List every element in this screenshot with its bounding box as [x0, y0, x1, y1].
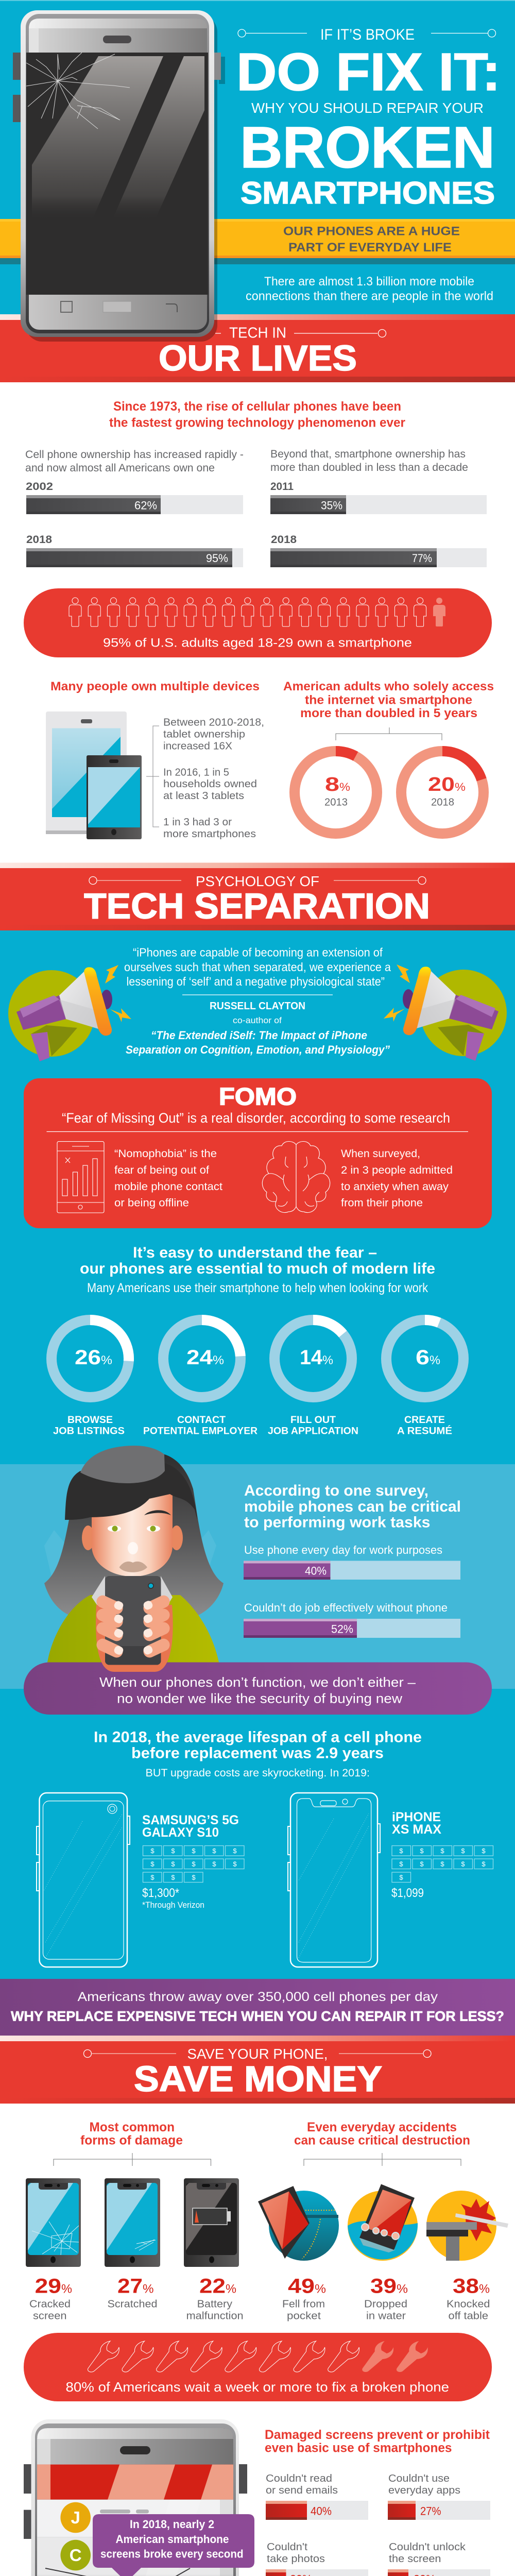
icon: iphone outline [288, 1793, 380, 1967]
panel: multiple devices: Many people own multiple devices [50, 680, 260, 693]
callout: 80% wait a week: 80% of Americans wait a week or more to fix a broken phone [66, 2379, 449, 2395]
icon: megaphone left [8, 965, 131, 1061]
text: according to one survey: to performing work tasks [244, 1514, 431, 1531]
dollar boxes: $ [440, 1847, 444, 1855]
contact avatars: J [71, 2508, 80, 2527]
bar: 2018 77%: 77% [412, 552, 432, 565]
donut: fill out job application [268, 1320, 358, 1436]
stat: dropped in water 39%: % [397, 2282, 408, 2296]
bar: 2018 95%: 95% [206, 552, 228, 565]
heading: psychology of tech separation [0, 862, 515, 930]
contact avatars: C [70, 2546, 82, 2565]
dollar boxes: $ [212, 1847, 216, 1855]
dollar boxes: $ [399, 1860, 403, 1868]
list rows [37, 2500, 233, 2576]
band: americans throw away: WHY REPLACE EXPENSIVE TECH WHEN YOU CAN REPAIR IT FOR LESS? [11, 2009, 504, 2024]
callout: when our phones don't function: no wonder we like the security of buying new [117, 1690, 402, 1706]
dollar boxes: $ [192, 1873, 196, 1882]
bar: emails 40%: Couldn't read [266, 2473, 332, 2484]
icon: phone with cracked screen [26, 2178, 81, 2267]
stat: scratched 27%: 27 [117, 2275, 143, 2298]
illustration: big cracked phone with contacts [24, 2419, 254, 2576]
panel: FOMO [24, 1078, 492, 1228]
header eyebrow: if it's broke: IF IT’S BROKE [320, 26, 415, 43]
donut: contact potential employer [143, 1320, 258, 1436]
donut: create a resume: 6 [416, 1346, 430, 1369]
donut: fill out job application: % [322, 1353, 333, 1367]
stat: scratched 27% [107, 2275, 158, 2310]
band: americans throw away: Americans throw away over 350,000 cell phones per day [77, 1990, 438, 2004]
icon: megaphone right [384, 964, 507, 1061]
heading: everyday accidents [294, 2120, 470, 2166]
samsung price: $1,300* [142, 1886, 179, 1900]
icon: row of people [69, 598, 445, 626]
title: SMARTPHONES [241, 176, 495, 210]
stat: battery malfunction 22%: Battery [197, 2299, 232, 2310]
bar: unlock 20%: Couldn't unlock [389, 2541, 466, 2553]
heading: easy to understand the fear: Many Americans use their smartphone to help when looking for work [87, 1281, 428, 1295]
stat: battery malfunction 22%: malfunction [186, 2311, 244, 2322]
dollar boxes [392, 1845, 493, 1883]
heading: everyday accidents: can cause critical destruction [294, 2133, 470, 2148]
icon: phone with signal bars [57, 1142, 104, 1213]
text: nomophobia: mobile phone contact [114, 1181, 222, 1193]
dollar boxes: $ [192, 1847, 196, 1855]
icon: tablet and phone [46, 711, 142, 839]
hands: fingers [94, 1594, 172, 1659]
panel: damaged screens [265, 2428, 490, 2576]
panel: damaged screens: Damaged screens prevent or prohibit [265, 2428, 490, 2442]
stat: fell from pocket 49% [282, 2275, 326, 2322]
callout: 95% of adults [24, 588, 492, 657]
panel: multiple devices: 1 in 3 had 3 or [163, 817, 232, 828]
dollar boxes: $ [212, 1860, 216, 1868]
stat: scratched 27%: % [143, 2282, 153, 2296]
bar: apps 27%: 27% [420, 2505, 441, 2517]
panel: multiple devices: more smartphones [163, 828, 256, 840]
heading: most common forms of damage: forms of damage [80, 2133, 183, 2148]
quote: co-author of [233, 1015, 282, 1025]
callout: 2 screens per second: American smartphone [115, 2533, 229, 2546]
stat: cracked screen 29%: screen [33, 2311, 67, 2322]
donut: browse job listings [52, 1320, 129, 1436]
callout: when our phones don't function [24, 1662, 492, 1715]
contact avatars [60, 2502, 91, 2576]
heading: since 1973 [109, 399, 405, 430]
bar: photos 20%: take photos [267, 2553, 325, 2565]
text: when surveyed [341, 1148, 453, 1209]
band text: PART OF EVERYDAY LIFE [288, 241, 452, 255]
heading: tech in our lives: OUR LIVES [159, 338, 357, 378]
stat: knocked off table 38%: off table [448, 2311, 488, 2322]
donut: 2013 8%: % [339, 781, 350, 793]
stat: battery malfunction 22%: 22 [199, 2275, 226, 2298]
icon: dropped in water [348, 2184, 418, 2261]
intro text [246, 275, 493, 303]
heading: tech in our lives: TECH IN [229, 325, 286, 341]
panel: smartphone ownership: Beyond that, smartphone ownership has [270, 448, 466, 460]
panel: multiple devices: increased 16X [163, 741, 232, 752]
quote: “The Extended iSelf: The Impact of iPhone [151, 1029, 367, 1042]
bar: apps 27%: Couldn't use [388, 2473, 450, 2484]
stat: fell from pocket 49%: % [315, 2282, 326, 2296]
dollar boxes: $ [233, 1847, 237, 1855]
bar: 2002 62%: 62% [134, 499, 157, 512]
dollar boxes [143, 1845, 244, 1883]
panel: FOMO: “Fear of Missing Out” is a real disorder, according to some research [62, 1110, 450, 1126]
heading: easy to understand the fear: It’s easy to understand the fear – [133, 1244, 377, 1261]
donut: contact potential employer: CONTACT [177, 1415, 226, 1426]
dollar boxes: $ [171, 1860, 175, 1868]
icon: knocked off table [426, 2191, 508, 2261]
band text [283, 225, 460, 255]
stat: scratched 27%: Scratched [107, 2299, 158, 2310]
list placeholder lines [100, 2510, 182, 2576]
icon: samsung outline [37, 1793, 130, 1967]
donut: fill out job application: 14 [300, 1346, 323, 1369]
panel: damaged screens: even basic use of smartphones [265, 2441, 452, 2455]
panel: smartphone ownership: more than doubled in less than a decade [270, 462, 468, 473]
panel: cell phone ownership: 2002 [26, 481, 53, 493]
bar: emails 40% [266, 2473, 368, 2520]
dollar boxes: $ [420, 1847, 424, 1855]
heading: psychology of tech separation: TECH SEPARATION [84, 886, 430, 926]
samsung price: SAMSUNG’S 5G [142, 1813, 239, 1827]
donut: contact potential employer: % [213, 1353, 224, 1367]
bracket [146, 726, 159, 827]
quote [124, 946, 391, 1056]
screen crack [41, 2568, 193, 2576]
stat: fell from pocket 49%: 49 [288, 2275, 315, 2298]
donut: contact potential employer: 24 [186, 1346, 213, 1369]
stat: knocked off table 38%: 38 [453, 2275, 479, 2298]
donut: 2018 20%: 2018 [431, 796, 454, 808]
donut: 2013 8%: 8 [325, 774, 339, 795]
text: according to one survey: mobile phones can be critical [244, 1498, 461, 1515]
donut: 2018 20%: 20 [428, 774, 455, 795]
text: according to one survey: According to one survey, [244, 1482, 428, 1499]
donut: 2013 8% [295, 751, 377, 834]
bar: emails 40%: 40% [311, 2505, 332, 2517]
panel: smartphone ownership: 2018 [271, 534, 297, 546]
section background: teal [0, 930, 515, 1979]
dollar boxes: $ [399, 1873, 403, 1882]
stat: cracked screen 29%: Cracked [29, 2299, 71, 2310]
heading: average lifespan: BUT upgrade costs are skyrocketing. In 2019: [145, 1767, 370, 1779]
bar: work purposes 40%: Use phone every day for work purposes [244, 1544, 442, 1556]
bar: 2018 95% [26, 548, 243, 567]
quote: “iPhones are capable of becoming an extension of [133, 946, 383, 959]
text: nomophobia [114, 1148, 222, 1209]
stat: battery malfunction 22%: % [226, 2282, 236, 2296]
intro text: There are almost 1.3 billion more mobile [264, 275, 474, 289]
icon: brain [262, 1142, 330, 1213]
bar: job effectiveness 52% [244, 1601, 460, 1638]
dollar boxes: $ [233, 1860, 237, 1868]
donut: 2013 8%: 2013 [324, 796, 348, 808]
dollar boxes: $ [399, 1847, 403, 1855]
text: when surveyed: When surveyed, [341, 1148, 420, 1160]
header: red screen stripes [37, 2465, 233, 2500]
title: BROKEN [240, 115, 495, 180]
bar: unlock 20%: the screen [389, 2553, 441, 2565]
iphone price: $1,099 [391, 1886, 424, 1900]
bar: 2011 35% [270, 495, 487, 514]
samsung price: *Through Verizon [142, 1900, 204, 1910]
bar: 2018 77% [270, 548, 487, 567]
bar: 2011 35%: 35% [321, 499, 342, 512]
stat: knocked off table 38%: % [479, 2282, 490, 2296]
donut: browse job listings: % [101, 1353, 112, 1367]
stat: dropped in water 39%: in water [366, 2311, 406, 2322]
panel: cell phone ownership: 2018 [26, 534, 52, 546]
icon: cracked smartphone [13, 10, 225, 342]
text: nomophobia: “Nomophobia” is the [114, 1148, 217, 1160]
callout: when our phones don't function: When our phones don’t function, we don’t either – [99, 1674, 416, 1690]
panel: cell phone ownership: Cell phone ownership has increased rapidly - [25, 449, 244, 461]
bar: emails 40%: or send emails [266, 2485, 338, 2496]
heading: most common forms of damage: Most common [90, 2120, 175, 2134]
donut: create a resume: % [430, 1353, 440, 1367]
heading: save your phone save money: SAVE YOUR PHONE, [187, 2046, 328, 2062]
panel: FOMO: FOMO [219, 1083, 297, 1110]
heading: save your phone save money [0, 2036, 515, 2104]
callout: 80% wait a week [24, 2333, 492, 2401]
title [236, 42, 501, 210]
bar: 2002 62% [26, 495, 243, 514]
dollar boxes: $ [150, 1860, 154, 1868]
bar: unlock 20% [388, 2541, 490, 2576]
panel: internet via smartphone: American adults who solely access [283, 680, 494, 693]
stat: knocked off table 38%: Knocked [447, 2299, 490, 2310]
iphone price: XS MAX [392, 1822, 441, 1837]
bar: job effectiveness 52%: Couldn’t do job effectively without phone [244, 1601, 448, 1614]
donut: browse job listings: BROWSE [67, 1415, 113, 1426]
band: americans throw away [0, 1979, 515, 2036]
dollar boxes: $ [420, 1860, 424, 1868]
donut: fill out job application: JOB APPLICATION [268, 1426, 358, 1436]
donut: browse job listings: JOB LISTINGS [53, 1426, 125, 1436]
header eyebrow: if it's broke [238, 26, 495, 43]
heading: psychology of tech separation: PSYCHOLOGY OF [196, 873, 319, 889]
stat: knocked off table 38% [447, 2275, 490, 2322]
icon: phone with scratched screen [105, 2178, 160, 2267]
stat: battery malfunction 22% [186, 2275, 244, 2322]
panel: multiple devices [46, 680, 264, 840]
text: when surveyed: 2 in 3 people admitted [341, 1164, 453, 1176]
panel: multiple devices: In 2016, 1 in 5 [163, 767, 229, 778]
band text: OUR PHONES ARE A HUGE [283, 225, 460, 238]
icon: row of wrenches [88, 2341, 428, 2372]
heading: most common forms of damage [54, 2120, 211, 2166]
text: when surveyed: from their phone [341, 1197, 423, 1209]
heading: average lifespan: before replacement was 2.9 years [131, 1744, 384, 1762]
title: WHY YOU SHOULD REPAIR YOUR [251, 100, 484, 116]
panel: smartphone ownership [270, 448, 487, 567]
donut: create a resume: CREATE [404, 1415, 445, 1426]
bar: apps 27%: everyday apps [388, 2485, 460, 2496]
donut: 2018 20% [401, 751, 484, 834]
stat: dropped in water 39% [364, 2275, 408, 2322]
icon: fell from pocket [258, 2186, 339, 2261]
section: hero header [0, 0, 515, 382]
panel: internet via smartphone [283, 680, 494, 834]
panel: multiple devices: at least 3 tablets [163, 790, 244, 802]
heading: save your phone save money: SAVE MONEY [134, 2059, 382, 2099]
dollar boxes: $ [192, 1860, 196, 1868]
text: nomophobia: or being offline [114, 1197, 189, 1209]
bar: work purposes 40%: 40% [305, 1565, 327, 1578]
dollar boxes: $ [150, 1847, 154, 1855]
panel: multiple devices: Between 2010-2018, [163, 717, 264, 728]
dollar boxes: $ [171, 1873, 175, 1882]
yellow band [0, 219, 515, 264]
panel: smartphone ownership: 2011 [270, 481, 294, 493]
quote: lessening of ‘self’ and a negative physiological state” [127, 975, 385, 988]
donut: contact potential employer: POTENTIAL EMPLOYER [143, 1426, 258, 1436]
panel: internet via smartphone: more than doubled in 5 years [300, 706, 477, 720]
dollar boxes: $ [482, 1860, 486, 1868]
dollar boxes: $ [461, 1847, 465, 1855]
panel: internet via smartphone: the internet via smartphone [305, 693, 472, 707]
quote: RUSSELL CLAYTON [210, 1001, 305, 1012]
donut: fill out job application: FILL OUT [290, 1415, 336, 1426]
quote: Separation on Cognition, Emotion, and Physiology” [126, 1043, 390, 1056]
heading: easy to understand the fear: our phones are essential to much of modern life [80, 1260, 435, 1277]
bar: photos 20%: Couldn't [267, 2541, 307, 2553]
dollar boxes: $ [150, 1873, 154, 1882]
intro text: connections than there are people in the world [246, 290, 493, 303]
panel: multiple devices: households owned [163, 778, 257, 790]
heading: everyday accidents: Even everyday accidents [307, 2120, 457, 2134]
stat: fell from pocket 49%: Fell from [282, 2299, 325, 2310]
text: according to one survey [244, 1482, 461, 1531]
donut: create a resume [386, 1320, 464, 1436]
quote: ourselves such that when separated, we experience a [124, 960, 391, 974]
donut: 2018 20%: % [455, 781, 466, 793]
donut: browse job listings: 26 [75, 1346, 101, 1369]
heading: average lifespan [94, 1729, 422, 1779]
callout: 2 screens per second [93, 2514, 254, 2576]
stat: dropped in water 39%: 39 [370, 2275, 397, 2298]
stat: cracked screen 29%: % [61, 2282, 72, 2296]
heading: easy to understand the fear [80, 1244, 435, 1295]
callout: 2 screens per second: In 2018, nearly 2 [130, 2518, 214, 2531]
text: nomophobia: fear of being out of [114, 1164, 209, 1176]
heading: average lifespan: In 2018, the average lifespan of a cell phone [94, 1729, 422, 1745]
dollar boxes: $ [171, 1847, 175, 1855]
dollar boxes: $ [440, 1860, 444, 1868]
callout: 2 screens per second: screens broke every second [100, 2548, 244, 2561]
panel: work survey band [0, 1464, 515, 1689]
bar: job effectiveness 52%: 52% [331, 1623, 353, 1635]
panel: cell phone ownership: and now almost all Americans own one [25, 462, 215, 474]
stat: fell from pocket 49%: pocket [287, 2311, 321, 2322]
bar: work purposes 40% [244, 1544, 460, 1580]
illustration: woman holding phone [44, 1446, 224, 1672]
icon: phone with dead battery [184, 2178, 239, 2267]
title: DO FIX IT: [236, 42, 501, 101]
iphone price [391, 1810, 493, 1900]
iphone price: iPHONE [392, 1810, 441, 1824]
stat: cracked screen 29%: 29 [35, 2275, 61, 2298]
donut: create a resume: A RESUMÉ [397, 1425, 452, 1436]
stat: dropped in water 39%: Dropped [364, 2299, 407, 2310]
bar: apps 27% [388, 2473, 490, 2520]
bar: photos 20% [266, 2541, 368, 2576]
heading: since 1973: Since 1973, the rise of cellular phones have been [113, 399, 401, 414]
text: when surveyed: to anxiety when away [341, 1181, 449, 1193]
heading: tech in our lives [159, 325, 386, 378]
stat: cracked screen 29% [29, 2275, 72, 2322]
samsung price: GALAXY S10 [142, 1825, 219, 1840]
heading: since 1973: the fastest growing technology phenomenon ever [109, 415, 405, 430]
callout: 95% of adults: 95% of U.S. adults aged 18-29 own a smartphone [103, 636, 412, 650]
dollar boxes: $ [461, 1860, 465, 1868]
panel: multiple devices: tablet ownership [163, 728, 245, 740]
panel: cell phone ownership [25, 449, 244, 567]
samsung price [142, 1813, 244, 1910]
dollar boxes: $ [482, 1847, 486, 1855]
